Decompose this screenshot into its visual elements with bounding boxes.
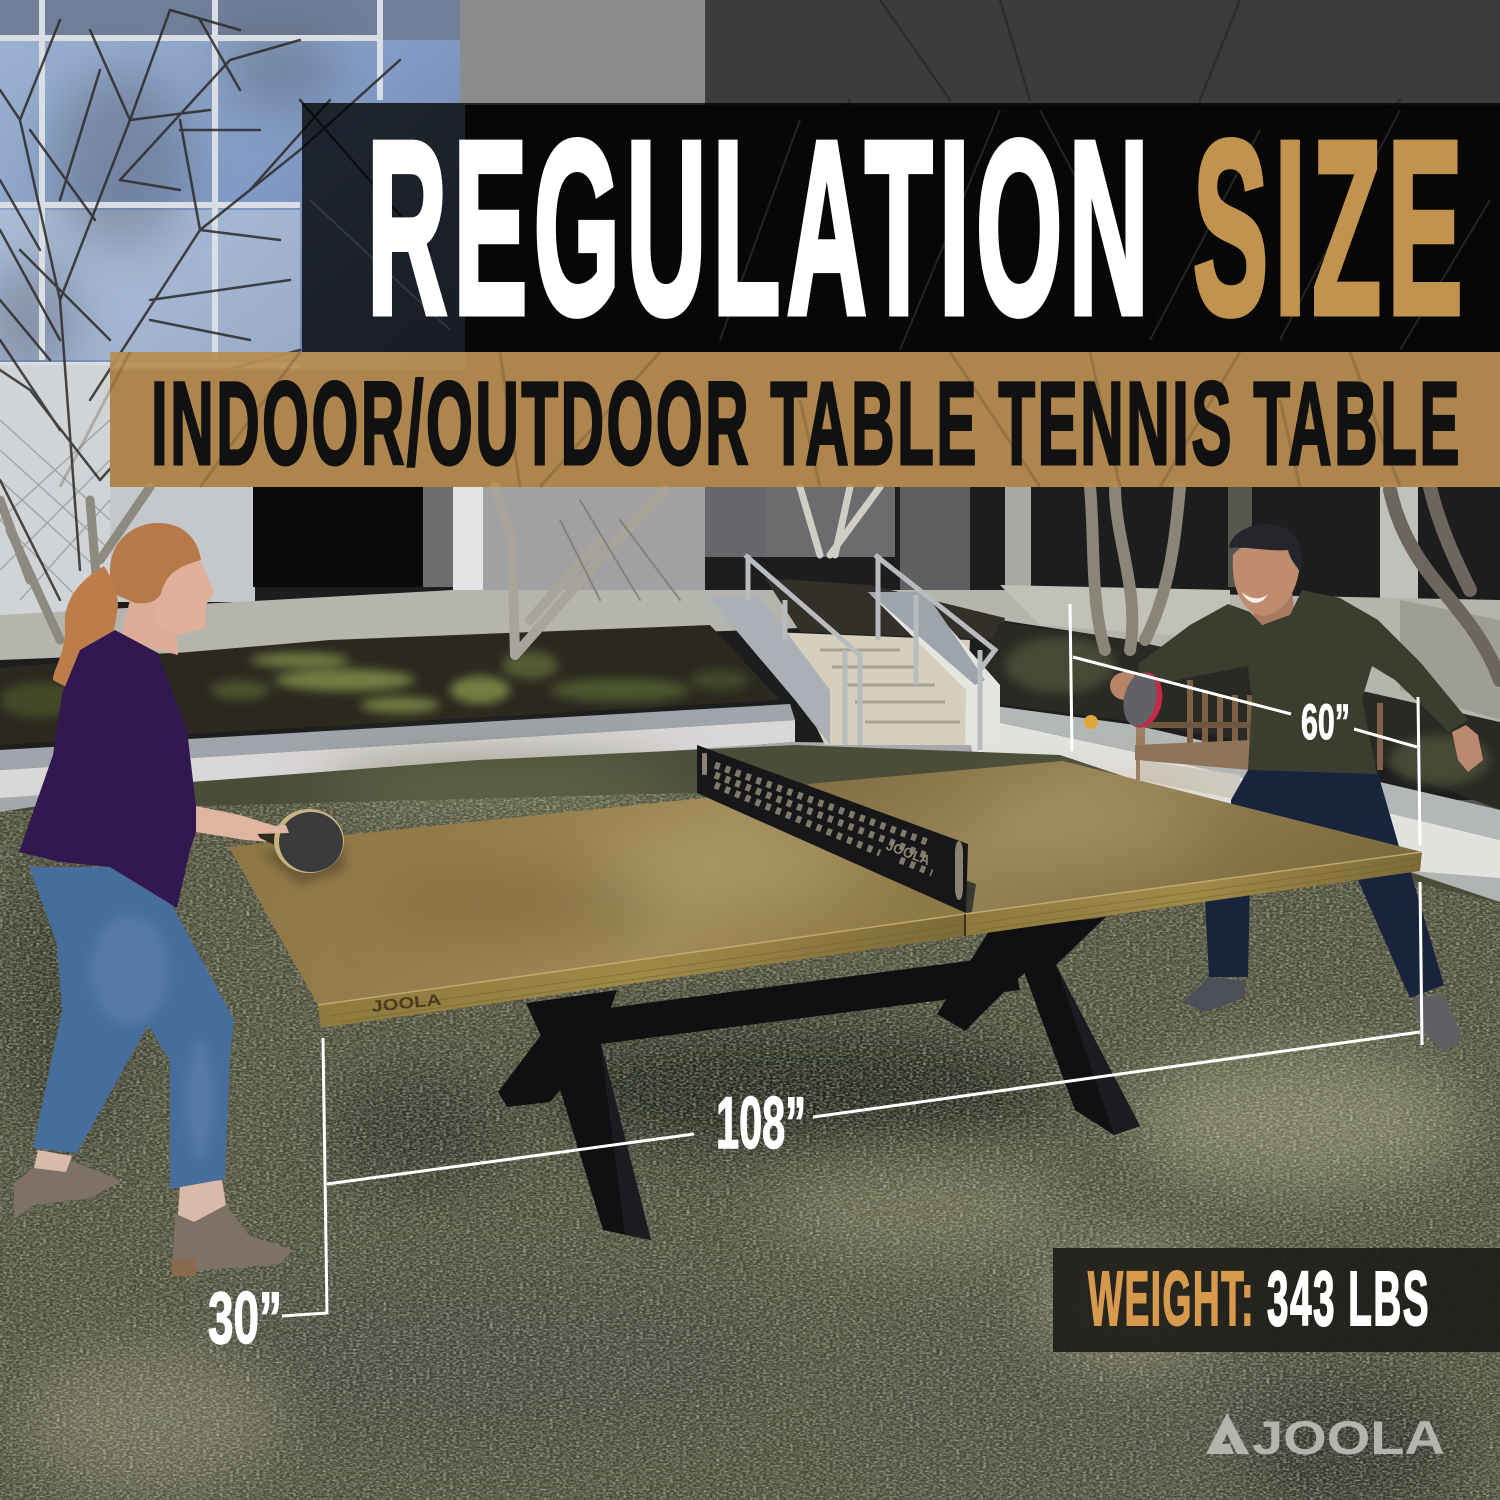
bench: [1135, 680, 1380, 800]
woman's ponytail: [53, 566, 118, 691]
108 inch length line left: [327, 1134, 694, 1184]
right side verticals: [1418, 697, 1422, 1045]
stairs with railings: [708, 555, 1000, 750]
table top: [229, 761, 1422, 1028]
30 inch height bracket: [282, 1038, 327, 1316]
table edge logo: JOOLA: [371, 992, 443, 1016]
woman: player on the left: [14, 523, 344, 1276]
man's left shoe: [1183, 977, 1245, 1012]
man's sweater: [1138, 590, 1468, 774]
photo background: building and courtyard: [0, 0, 1500, 800]
dimension label: 30 inches: 30”: [208, 1278, 282, 1359]
icon: JOOLA logo: [1206, 1411, 1445, 1464]
weight text: WEIGHT:: [1088, 1256, 1255, 1342]
net: JOOLA: [884, 837, 933, 868]
man's right shoe: [1413, 994, 1463, 1052]
man's neck: [1250, 590, 1295, 625]
108 inch length line right: [813, 1032, 1420, 1117]
ball: [1084, 715, 1098, 729]
panel: weight box: [1053, 1248, 1500, 1352]
woman's neck: [120, 600, 178, 655]
kerb and low wall: [0, 702, 1500, 905]
60 inch width lines: [1070, 604, 1417, 751]
dimension label: 60 inches: 60”: [1301, 694, 1350, 750]
man's paddle hand: [1110, 672, 1140, 700]
grass lawn: [0, 745, 1500, 1500]
woman's sweater: [19, 630, 196, 908]
net: [697, 745, 976, 913]
man's hair: [1229, 524, 1302, 572]
man's paddle: [1119, 669, 1167, 731]
woman's boots: [14, 1161, 293, 1276]
dimension lines: [282, 604, 1422, 1316]
woman's ankles: [34, 1150, 226, 1222]
woman's jeans: [29, 867, 234, 1189]
man: player on the right: [1084, 524, 1483, 1052]
man's free hand: [1452, 725, 1483, 772]
faint branches over subtitle band: [60, 352, 1400, 487]
man's jeans: [1205, 770, 1444, 998]
background trees: [0, 0, 1500, 680]
faint branches over title band: [310, 110, 1490, 350]
man's head: [1233, 540, 1301, 616]
woman's head: [150, 561, 214, 635]
icon: JOOLA logo: JOOLA: [1252, 1411, 1445, 1464]
woman's paddle: [250, 809, 344, 873]
planting bed: [0, 622, 1500, 810]
panel: title black band: [302, 103, 1500, 352]
panel: subtitle gold band: [110, 352, 1500, 487]
woman's arm: [196, 806, 282, 842]
table legs and crossbeam: [498, 917, 1140, 1240]
woman's hair: [105, 523, 201, 603]
pavement strip: [0, 590, 1500, 725]
dimension label: 108 inches: 108”: [716, 1083, 806, 1164]
man's smile: [1242, 592, 1268, 603]
